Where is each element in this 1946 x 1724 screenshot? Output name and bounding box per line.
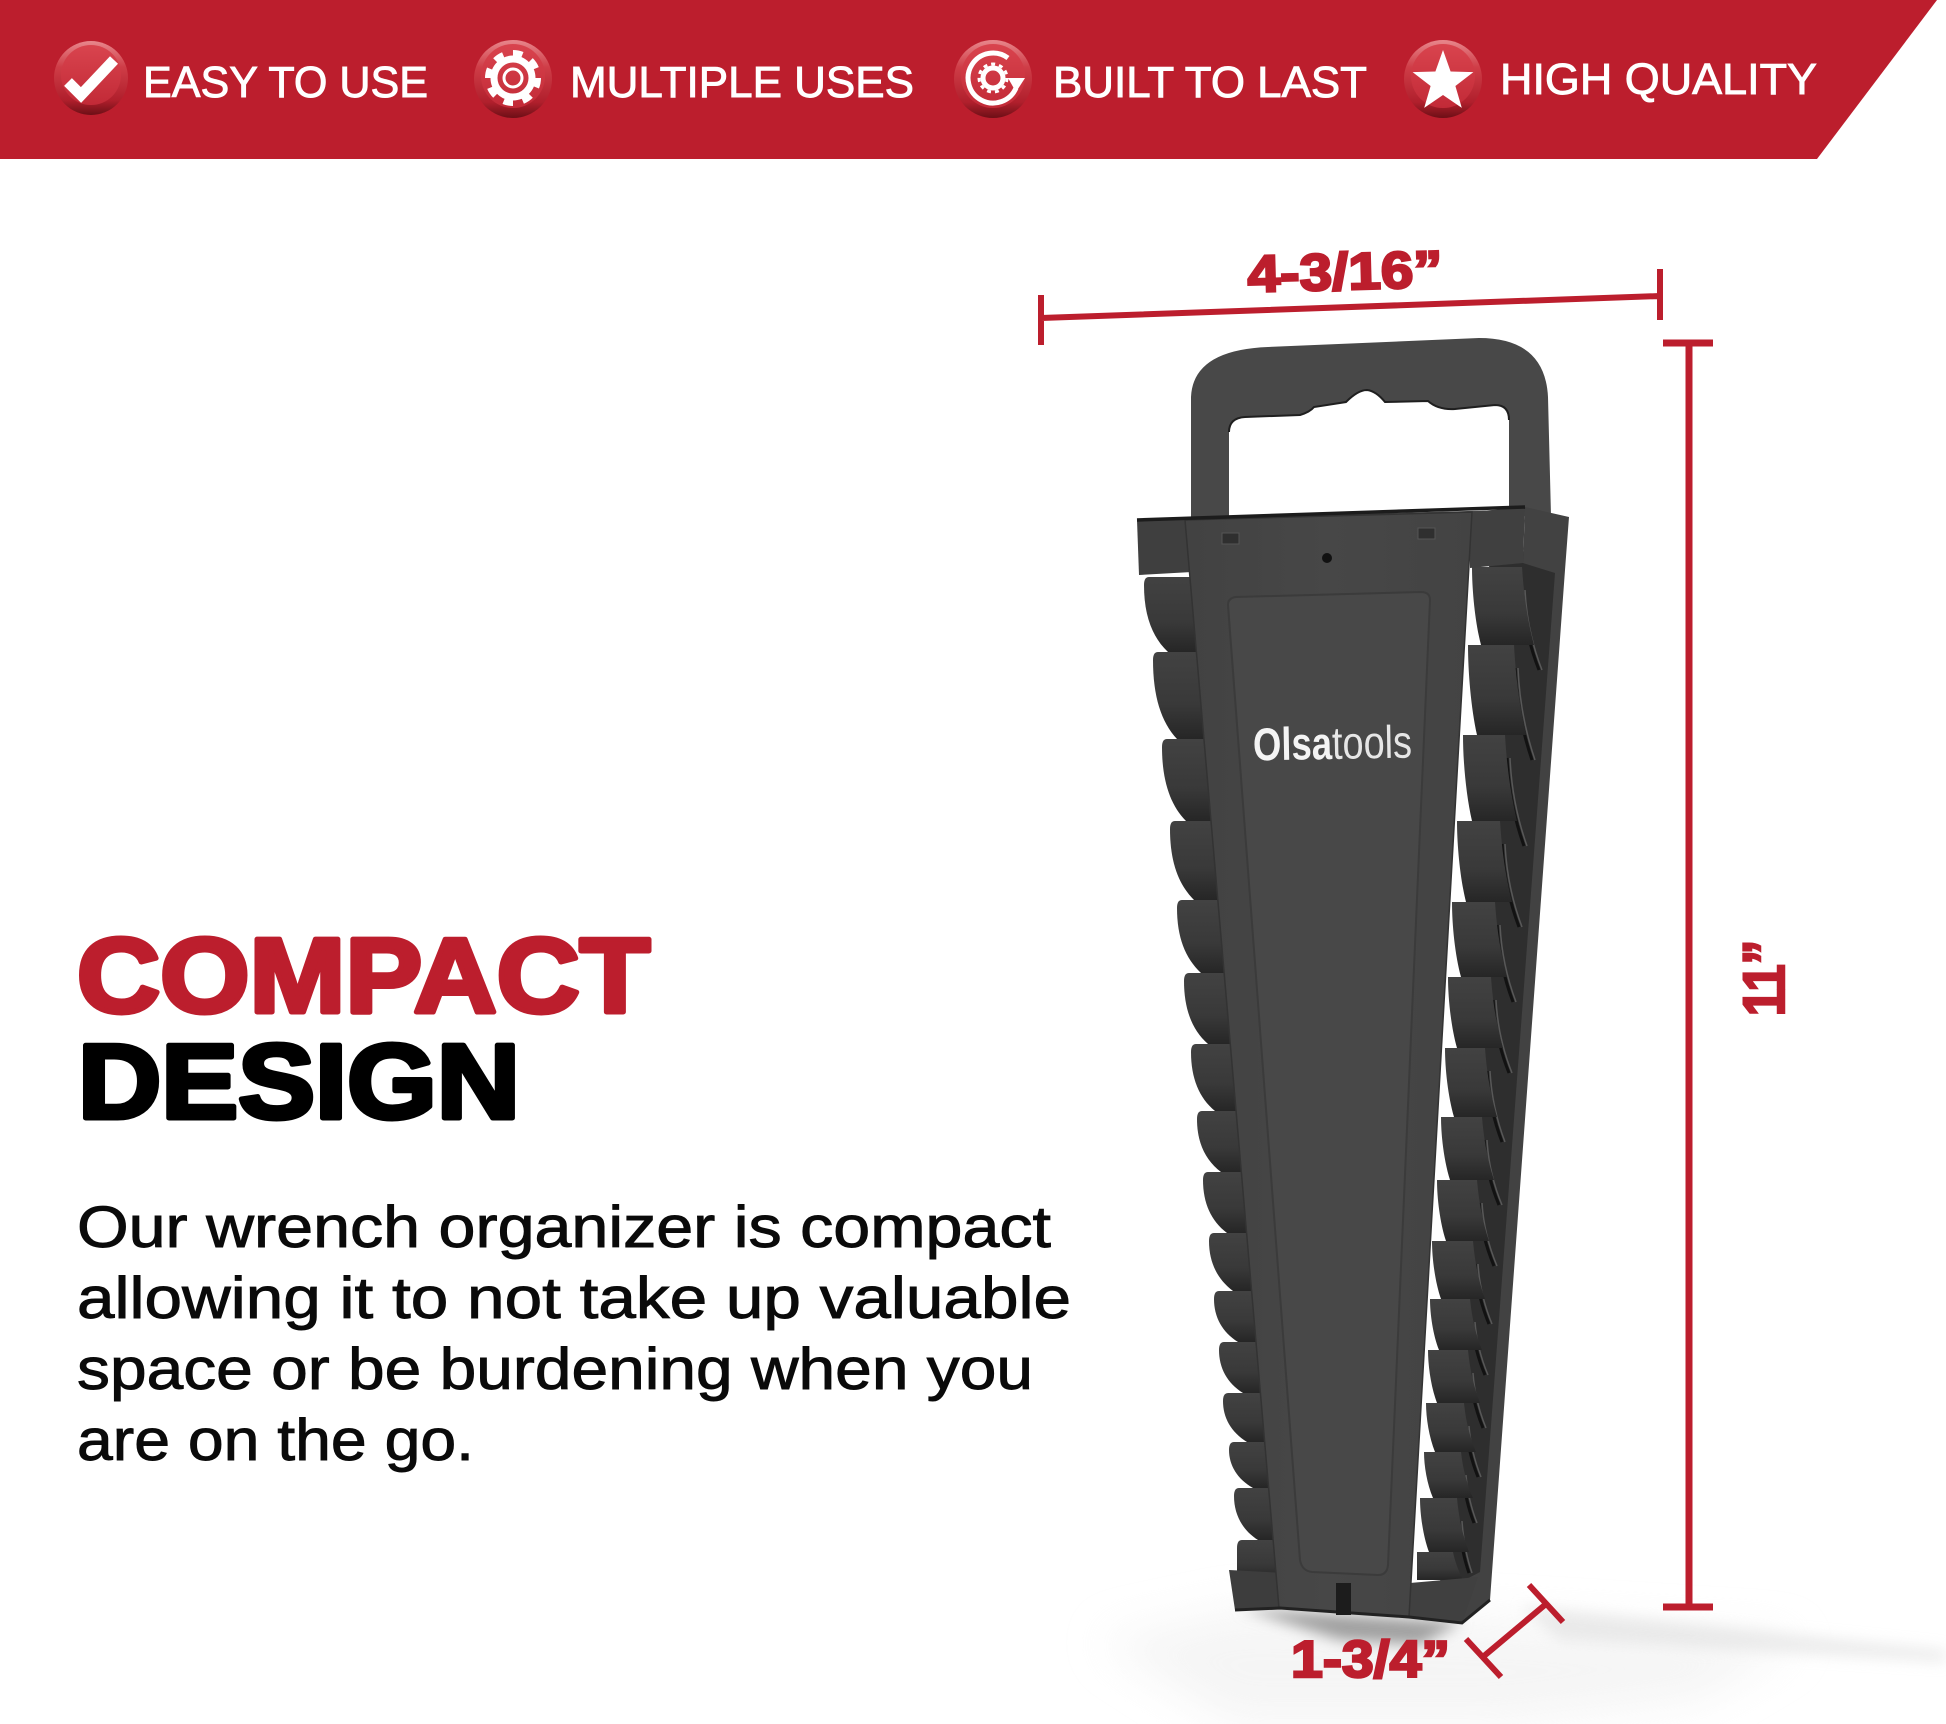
base edge shadow	[1235, 1600, 1490, 1623]
label: built to last: BUILT TO LAST	[1053, 58, 1367, 107]
handle	[1191, 338, 1551, 520]
outer frame right side	[1455, 507, 1569, 1623]
bottom notch	[1336, 1583, 1351, 1615]
heading	[77, 917, 650, 1141]
right teeth	[1417, 567, 1534, 1580]
icon: check mark badge	[54, 41, 128, 115]
brand logo: tools	[1332, 716, 1412, 769]
body text: are on the go.	[77, 1408, 474, 1473]
height label: 11”	[1732, 940, 1797, 1016]
dimension: depth	[1291, 1585, 1563, 1689]
mounting hole	[1322, 553, 1332, 563]
banner: red ribbon with benefits	[0, 0, 1937, 159]
left teeth	[1144, 577, 1301, 1580]
top edge shadow	[1137, 507, 1525, 520]
left top block	[1137, 518, 1192, 575]
dimension: height	[1663, 343, 1797, 1607]
label: multiple uses: MULTIPLE USES	[570, 58, 914, 107]
heading: COMPACT	[77, 917, 650, 1035]
icon: renewal arrow gear badge	[954, 40, 1032, 118]
right rail with crescents	[1440, 548, 1560, 1585]
icon: star badge	[1404, 40, 1482, 118]
heading: DESIGN	[78, 1023, 520, 1141]
body text: space or be burdening when you	[77, 1337, 1033, 1402]
width label: 4-3/16”	[1247, 241, 1443, 304]
body text: Our wrench organizer is compact	[77, 1195, 1051, 1260]
center panel	[1185, 512, 1472, 1617]
depth label: 1-3/4”	[1291, 1631, 1450, 1689]
body text	[77, 1195, 1071, 1473]
label: high quality: HIGH QUALITY	[1500, 55, 1817, 104]
floor shadow	[1100, 1606, 1946, 1724]
icon: gear badge	[474, 40, 552, 118]
right base block	[1405, 1577, 1478, 1623]
body text: allowing it to not take up valuable	[77, 1266, 1071, 1331]
mounting slots	[1222, 528, 1435, 544]
dimension: width	[1041, 241, 1660, 345]
inset panel	[1228, 592, 1430, 1575]
product: wrench organizer	[1137, 338, 1569, 1623]
left base block	[1229, 1570, 1284, 1610]
brand logo	[1253, 716, 1412, 770]
brand logo: Olsa	[1253, 717, 1333, 770]
right top block	[1470, 507, 1525, 568]
label: easy to use: EASY TO USE	[143, 58, 428, 107]
